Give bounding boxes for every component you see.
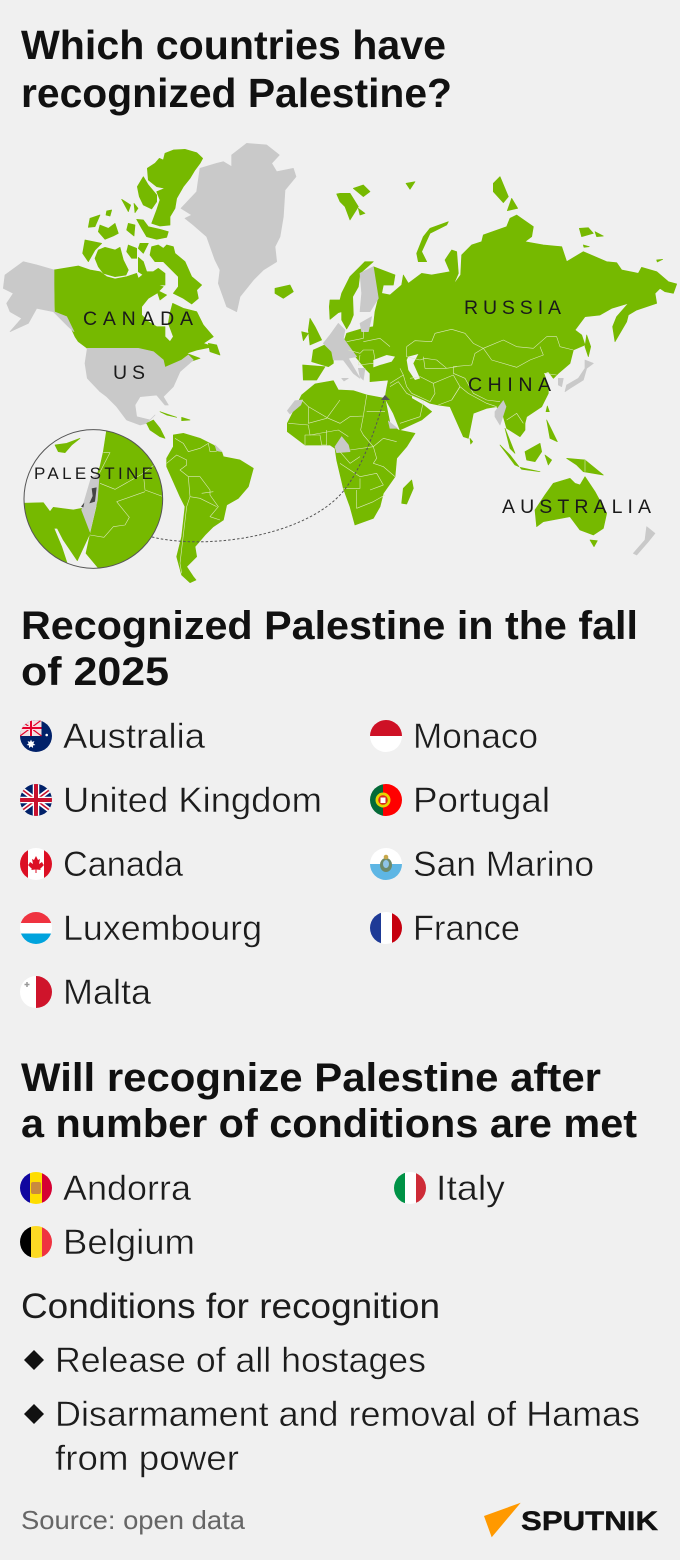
Alaska (3, 262, 74, 332)
Iceland (275, 285, 293, 298)
flag: Portugal (370, 784, 402, 816)
Black Sea (373, 355, 395, 367)
text: France: France (413, 909, 520, 948)
Asian borders (407, 329, 573, 350)
heading: will recognize after conditions: Will recognize Palestine after (21, 1056, 601, 1100)
text: Andorra: Andorra (63, 1169, 192, 1208)
Israel (82, 473, 99, 532)
Madagascar (402, 480, 413, 504)
text: Italy: Italy (436, 1169, 506, 1208)
West Bank (89, 487, 97, 503)
text: Luxembourg: Luxembourg (63, 909, 262, 948)
South Korea (558, 378, 563, 387)
South America (167, 433, 253, 583)
flag: United Kingdom (20, 784, 52, 816)
label: Palestine: PALESTINE (34, 464, 153, 483)
label: US: US (113, 362, 145, 384)
flag: Malta (20, 976, 52, 1008)
title (21, 22, 452, 116)
text: San Marino: San Marino (413, 845, 594, 884)
source: Source: open data (21, 1505, 246, 1535)
Myanmar (495, 401, 506, 425)
heading: recognized in fall 2025 (21, 604, 638, 694)
bullet: release of all hostages: Release of all hostages (55, 1341, 426, 1380)
heading: recognized in fall 2025: of 2025 (21, 650, 169, 694)
text: Canada: Canada (63, 845, 184, 884)
bullet: disarmament (24, 1395, 640, 1478)
text: Monaco: Monaco (413, 717, 538, 756)
New Zealand (633, 527, 655, 555)
Cameroon (335, 437, 350, 453)
flag: Canada (20, 848, 52, 880)
Central Europe (323, 323, 360, 378)
subheading: conditions for recognition: Conditions for recognition (21, 1287, 440, 1326)
Cyprus (55, 438, 80, 453)
flag: France (370, 912, 402, 944)
flag: Australia (20, 720, 52, 752)
label: Australia: AUSTRALIA (502, 496, 651, 518)
Canada (54, 149, 220, 367)
map: Eurasia (329, 177, 677, 555)
Gaza (81, 503, 84, 507)
title: recognized Palestine? (21, 70, 452, 116)
flag: Luxembourg (20, 912, 52, 944)
text: Australia: Australia (63, 717, 206, 756)
Caspian Sea (407, 354, 420, 380)
label: Russia: RUSSIA (464, 297, 561, 319)
Mexico (100, 392, 155, 425)
title: Which countries have (21, 22, 446, 68)
logo: Sputnik (484, 1503, 659, 1537)
Baltics (360, 317, 372, 332)
label: Canada: CANADA (83, 308, 193, 330)
text: United Kingdom: United Kingdom (63, 781, 322, 820)
label: China: CHINA (468, 374, 551, 396)
map: Africa (287, 381, 415, 525)
flag: San Marino (370, 848, 402, 880)
world map (3, 143, 677, 583)
map: Americas and Greenland (3, 143, 333, 583)
Levant and Arabia (86, 430, 167, 570)
South-East Asia islands (470, 406, 603, 475)
Australia (535, 477, 607, 535)
arrowhead (381, 395, 390, 400)
Japan (565, 360, 593, 392)
heading: will recognize after conditions: a number of conditions are met (21, 1102, 637, 1146)
bullet: disarmament: from power (55, 1439, 239, 1478)
flag: Belgium (20, 1226, 52, 1258)
text: Belgium: Belgium (63, 1223, 195, 1262)
logo: Sputnik: SPUTNIK (521, 1506, 659, 1536)
country list: recognized in fall 2025 (20, 717, 594, 1012)
text: Portugal: Portugal (413, 781, 550, 820)
heading: will recognize after conditions (21, 1056, 637, 1146)
Greenland (181, 143, 296, 312)
Arctic islands (337, 177, 663, 357)
Central America and Caribbean (147, 412, 190, 438)
Sicily and Sardinia (342, 378, 348, 381)
Western Sahara (287, 400, 303, 414)
flag: Andorra (20, 1172, 52, 1204)
heading: recognized in fall 2025: Recognized Palestine in the fall (21, 604, 638, 648)
text: Malta: Malta (63, 973, 152, 1012)
Scandinavia (329, 262, 373, 329)
inset: Palestine circle (17, 430, 167, 570)
map: Europe detail (323, 323, 390, 381)
Western Europe (308, 318, 322, 345)
flag: Monaco (370, 720, 402, 752)
country list: conditional recognition (20, 1169, 506, 1262)
Egypt and Sinai (24, 502, 90, 563)
flag: Italy (394, 1172, 426, 1204)
Greece (358, 368, 365, 380)
Eritrea (388, 421, 397, 428)
Finland (360, 267, 378, 312)
United States (85, 348, 193, 405)
dotted line to Palestine (152, 397, 385, 542)
bullet: disarmament: Disarmament and removal of Hamas (55, 1395, 640, 1434)
